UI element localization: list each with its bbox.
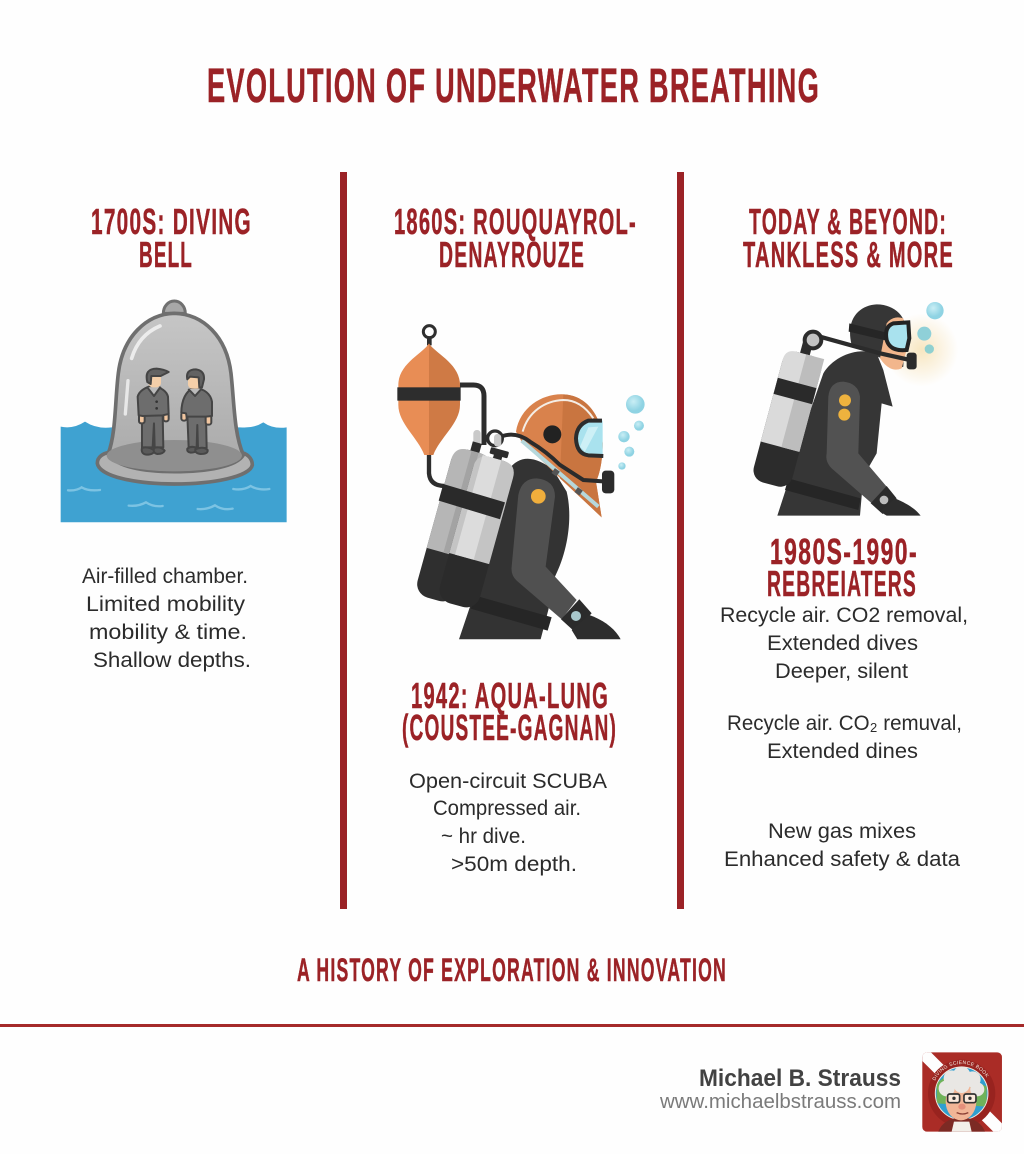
heading: rebreathers: 1980S-1990- bbox=[770, 531, 918, 572]
arm bbox=[512, 478, 577, 619]
text block: repeated rebreather facts: Recycle air. CO₂ remuval, bbox=[727, 711, 962, 735]
heading: 1860s Rouquayrol-Denayrouze: 1860S: ROUQUAYROL- bbox=[394, 201, 637, 242]
heading: 1942 Aqua-Lung: (COUSTEE-GAGNAN) bbox=[402, 707, 617, 748]
text block: rebreather facts: Recycle air. CO2 removal, bbox=[720, 603, 968, 627]
panel: right column bbox=[720, 201, 968, 871]
footer: author credit: www.michaelbstrauss.com bbox=[659, 1091, 901, 1113]
text block: rebreather facts: Extended dives bbox=[767, 631, 918, 655]
text block: repeated rebreather facts bbox=[727, 711, 962, 763]
text block: diving bell facts: Air-filled chamber. bbox=[82, 564, 248, 588]
head bbox=[850, 304, 905, 369]
helmet bbox=[516, 394, 603, 517]
cylinders bbox=[488, 431, 502, 446]
heading: 1700s diving bell: 1700S: DIVING bbox=[91, 201, 252, 242]
divider left bbox=[340, 172, 347, 909]
torso bbox=[777, 351, 893, 516]
text block: diving bell facts: Limited mobility bbox=[86, 592, 245, 616]
text block: tankless facts: New gas mixes bbox=[768, 819, 916, 843]
cylinder bbox=[751, 338, 827, 490]
person left bbox=[138, 369, 169, 455]
heading: 1700s diving bell: BELL bbox=[139, 234, 193, 275]
icon: modern diver bbox=[751, 302, 958, 516]
text block: tankless facts bbox=[724, 819, 960, 871]
text block: rebreather facts: Deeper, silent bbox=[775, 659, 908, 683]
arm bbox=[826, 382, 887, 503]
heading: 1942 Aqua-Lung: 1942: AQUA-LUNG bbox=[411, 675, 609, 716]
text block: repeated rebreather facts: Extended dines bbox=[767, 739, 918, 763]
icon: diving bell in water bbox=[61, 301, 287, 522]
panel: center column bbox=[394, 201, 645, 876]
heading: 1860s Rouquayrol-Denayrouze: DENAYROUZE bbox=[439, 234, 585, 275]
heading: 1942 Aqua-Lung bbox=[402, 675, 617, 748]
text block: Aqua-Lung facts: Open-circuit SCUBA bbox=[409, 769, 608, 793]
heading: 1860s Rouquayrol-Denayrouze bbox=[394, 201, 637, 275]
panel: diving bell column bbox=[61, 201, 287, 672]
icon: diver with air bladder and helmet bbox=[397, 326, 645, 639]
text block: Aqua-Lung facts bbox=[409, 769, 608, 876]
divider right bbox=[677, 172, 684, 909]
text block: Aqua-Lung facts: >50m depth. bbox=[451, 852, 577, 876]
icon: author logo: DIVING SCIENCE BOOK bbox=[932, 1060, 989, 1080]
person right bbox=[181, 369, 212, 454]
text block: diving bell facts: Shallow depths. bbox=[93, 648, 251, 672]
text block: diving bell facts bbox=[82, 564, 251, 672]
text block: tankless facts: Enhanced safety & data bbox=[724, 847, 960, 871]
heading: rebreathers bbox=[767, 531, 918, 604]
text block: diving bell facts: mobility & time. bbox=[89, 620, 247, 644]
footer rule bbox=[0, 1024, 1024, 1027]
text block: rebreather facts bbox=[720, 603, 968, 683]
footer: author credit bbox=[659, 1065, 901, 1113]
heading: 1700s diving bell bbox=[91, 201, 252, 275]
text block: Aqua-Lung facts: ~ hr dive. bbox=[441, 824, 526, 848]
suit torso bbox=[459, 459, 569, 639]
footer: author credit: Michael B. Strauss bbox=[699, 1065, 901, 1092]
heading: today and beyond bbox=[743, 201, 954, 275]
text block: Aqua-Lung facts: Compressed air. bbox=[433, 796, 581, 820]
icon: author logo bbox=[922, 1052, 1002, 1132]
